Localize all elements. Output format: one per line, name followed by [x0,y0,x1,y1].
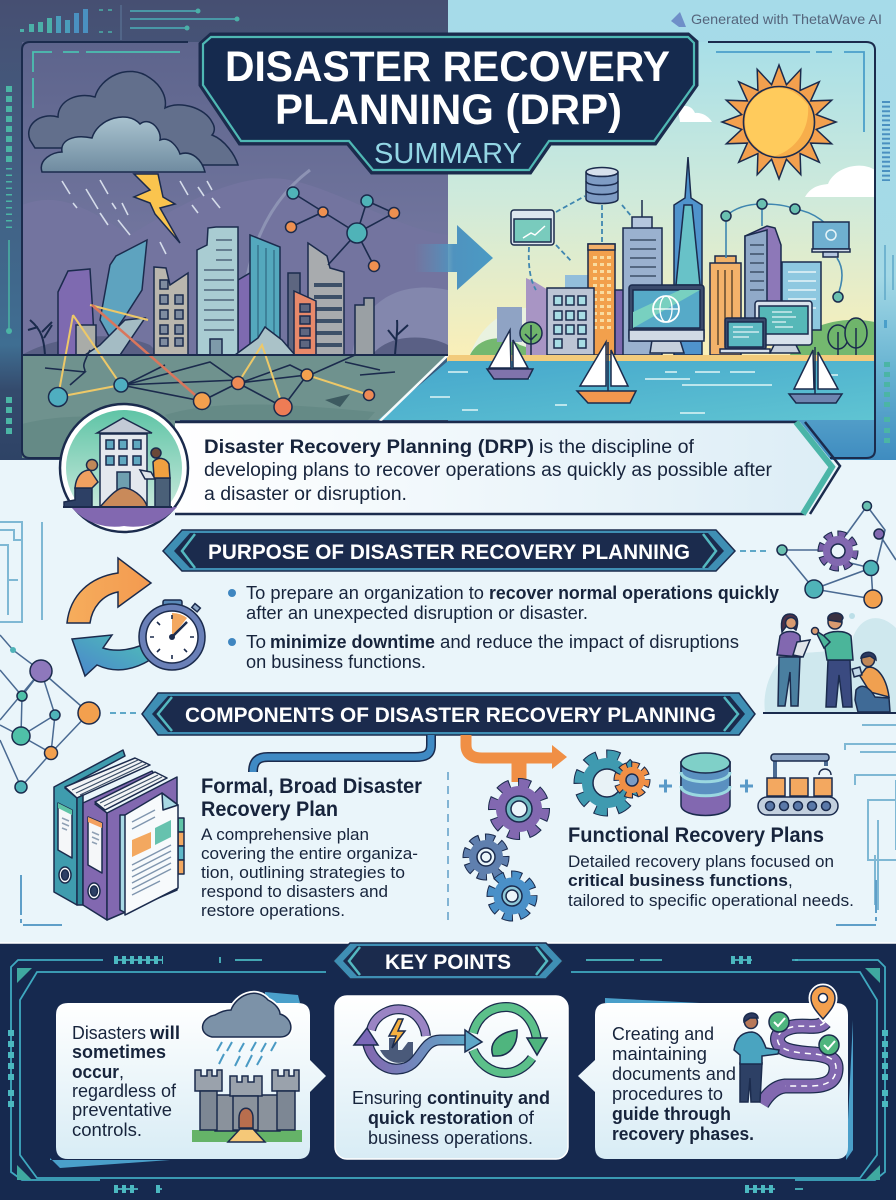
icon: blue gear small [466,838,506,876]
formal plan text: Recovery Plan [201,798,338,821]
light blue building [782,262,821,330]
key point 1: preventative [72,1100,172,1120]
formal plan text: Formal, Broad Disaster [201,775,422,798]
formal plan text: respond to disasters and [201,882,388,901]
icon: recovery arrows and stopwatch [67,558,205,676]
link dashes [740,550,766,552]
key points banner [333,943,563,979]
icon: restored cycle [473,1007,547,1073]
left network [0,635,100,793]
corner triangles [17,968,880,1180]
key point 3: procedures to [612,1084,723,1104]
icon: binders and document [54,750,184,920]
definition box: a disaster or disruption. [204,484,407,505]
icon: team of three [763,613,896,713]
functional plans text: Detailed recovery plans focused on [568,852,834,871]
browser window chart [511,210,554,245]
purpose bullets: after an unexpected disruption or disaster. [246,603,588,623]
orange tower [588,244,615,355]
icon: castle [192,1070,302,1142]
back buildings [497,157,821,355]
orange slatted building [715,256,736,264]
left side circuit [0,522,42,622]
purpose bullets: To [246,632,266,652]
clear sky [448,42,875,356]
definition box [175,422,840,514]
key point 1 [50,992,326,1168]
storm sky [22,42,452,356]
key point 1: will [149,1023,180,1043]
functional plans text: Functional Recovery Plans [568,824,824,847]
purpose bullets [228,583,779,672]
clouds [678,106,712,122]
functional plans text: tailored to specific operational needs. [568,891,854,910]
trees [520,318,867,355]
panel dashes [114,957,803,1189]
purpose bullets: and reduce the impact of disruptions [440,632,739,652]
sun [722,65,836,179]
panel side squares [11,1030,885,1110]
diagonal seam [380,355,448,421]
sky network [286,187,400,272]
bay water [378,361,875,420]
components banner [142,693,755,735]
sailboat left [487,330,533,379]
title plate [201,35,696,172]
purpose bullets: on business functions. [246,652,426,672]
functional plans text: , [788,871,793,890]
dead trees [28,320,408,355]
second monitor [755,301,812,353]
dashed data links [529,196,632,290]
key points panel [0,943,896,1200]
key point 2: business operations. [368,1128,533,1148]
definition text: Disaster Recovery Planning (DRP) [204,437,534,458]
spire tower [674,157,702,355]
main desktop monitor [629,285,704,353]
database icon [586,168,618,204]
key point 3: documents and [612,1064,736,1084]
corner marks [21,875,876,925]
key point 1: occur [72,1062,119,1082]
plus sign [659,780,672,792]
purpose bullets: To prepare an organization to [246,583,484,603]
icon: blue gear [491,875,533,917]
sailboat right [789,347,842,403]
icon: disruption cycle [354,1009,482,1069]
arc network [721,199,843,302]
key point 1: sometimes [72,1042,166,1062]
icon: rain cloud [203,993,291,1067]
definition box: is the discipline of [539,437,695,458]
back storm cloud [29,71,238,172]
link dashes [110,712,138,714]
purpose banner [163,530,735,571]
divider [447,772,449,925]
shoreline sand [447,355,875,362]
key point 1: regardless of [72,1081,177,1101]
icon: purple gear [493,783,545,835]
icon: database [681,753,730,816]
title plate: PLANNING (DRP) [275,86,622,134]
key point 1 text: Disasters [72,1023,146,1043]
plus sign [740,780,753,792]
formal plan text: tion, outlining strategies to [201,863,405,882]
right corner mark [716,52,864,132]
formal plan text: A comprehensive plan [201,825,369,844]
watermark: Generated with ThetaWave AI [691,11,882,27]
header background: bright recovery half [448,0,896,460]
connector: blue branch [253,735,431,772]
ground cracks [45,350,395,385]
purpose bullets: recover normal operations quickly [489,583,779,603]
key point 3: guide through [612,1104,731,1124]
icon: building recovery [60,404,188,532]
scene frame [22,42,875,458]
green hills [470,320,875,355]
formal plan text [201,775,422,920]
blue office [641,200,643,217]
subtitle: SUMMARY [374,138,522,170]
purpose heading: PURPOSE OF DISASTER RECOVERY PLANNING [208,541,690,564]
functional plans text [568,824,854,910]
lightning bolt [134,174,180,243]
key points heading: KEY POINTS [385,951,511,974]
curved tower [745,226,781,320]
panel frame [11,960,885,1180]
ground network [48,305,374,416]
right network with gear [777,502,896,608]
definition box: developing plans to recover operations as quickly as possible after [204,460,773,481]
components heading: COMPONENTS OF DISASTER RECOVERY PLANNING [185,704,716,727]
key point 2 text: Ensuring [352,1088,422,1108]
left edge signal bars [6,86,12,434]
key point 2 [335,996,568,1159]
ruined buildings [58,227,374,355]
header background: dark storm half [0,0,448,460]
functional plans text: critical business functions [568,871,788,890]
icon: recovery road with person [734,986,839,1104]
front storm cloud [41,117,205,172]
right edge signal bars [884,101,893,443]
rain [62,180,220,254]
water highlights [430,372,838,413]
top-left data decoration [20,5,240,40]
icon: conveyor [758,754,838,815]
frame corner marks [33,52,180,108]
storm scene [22,42,452,458]
laptop [720,318,770,353]
small monitor [812,222,850,257]
key point 3: maintaining [612,1044,707,1064]
title: DISASTER RECOVERY [225,43,670,91]
connector: blue branch fill [253,735,431,772]
key point 2: quick restoration [368,1108,513,1128]
purpose bullets: minimize downtime [270,632,435,652]
key point 3 text: Creating and [612,1024,714,1044]
key point 3 [578,986,853,1160]
recovered city scene [378,42,875,421]
icon: teal and orange gears [579,755,647,811]
key point 2: of [518,1108,535,1128]
grey office [547,288,594,355]
right side circuit [845,725,896,910]
transition arrow [414,225,493,290]
formal plan text: restore operations. [201,901,345,920]
key point 1: controls. [72,1120,142,1140]
key point 1: , [119,1062,124,1082]
key point 2: continuity and [427,1088,550,1108]
key point 3: recovery phases. [612,1124,754,1144]
ground [22,355,448,458]
formal plan text: covering the entire organiza- [201,844,418,863]
connector: orange branch [466,735,567,782]
sailboat centre [577,342,636,403]
